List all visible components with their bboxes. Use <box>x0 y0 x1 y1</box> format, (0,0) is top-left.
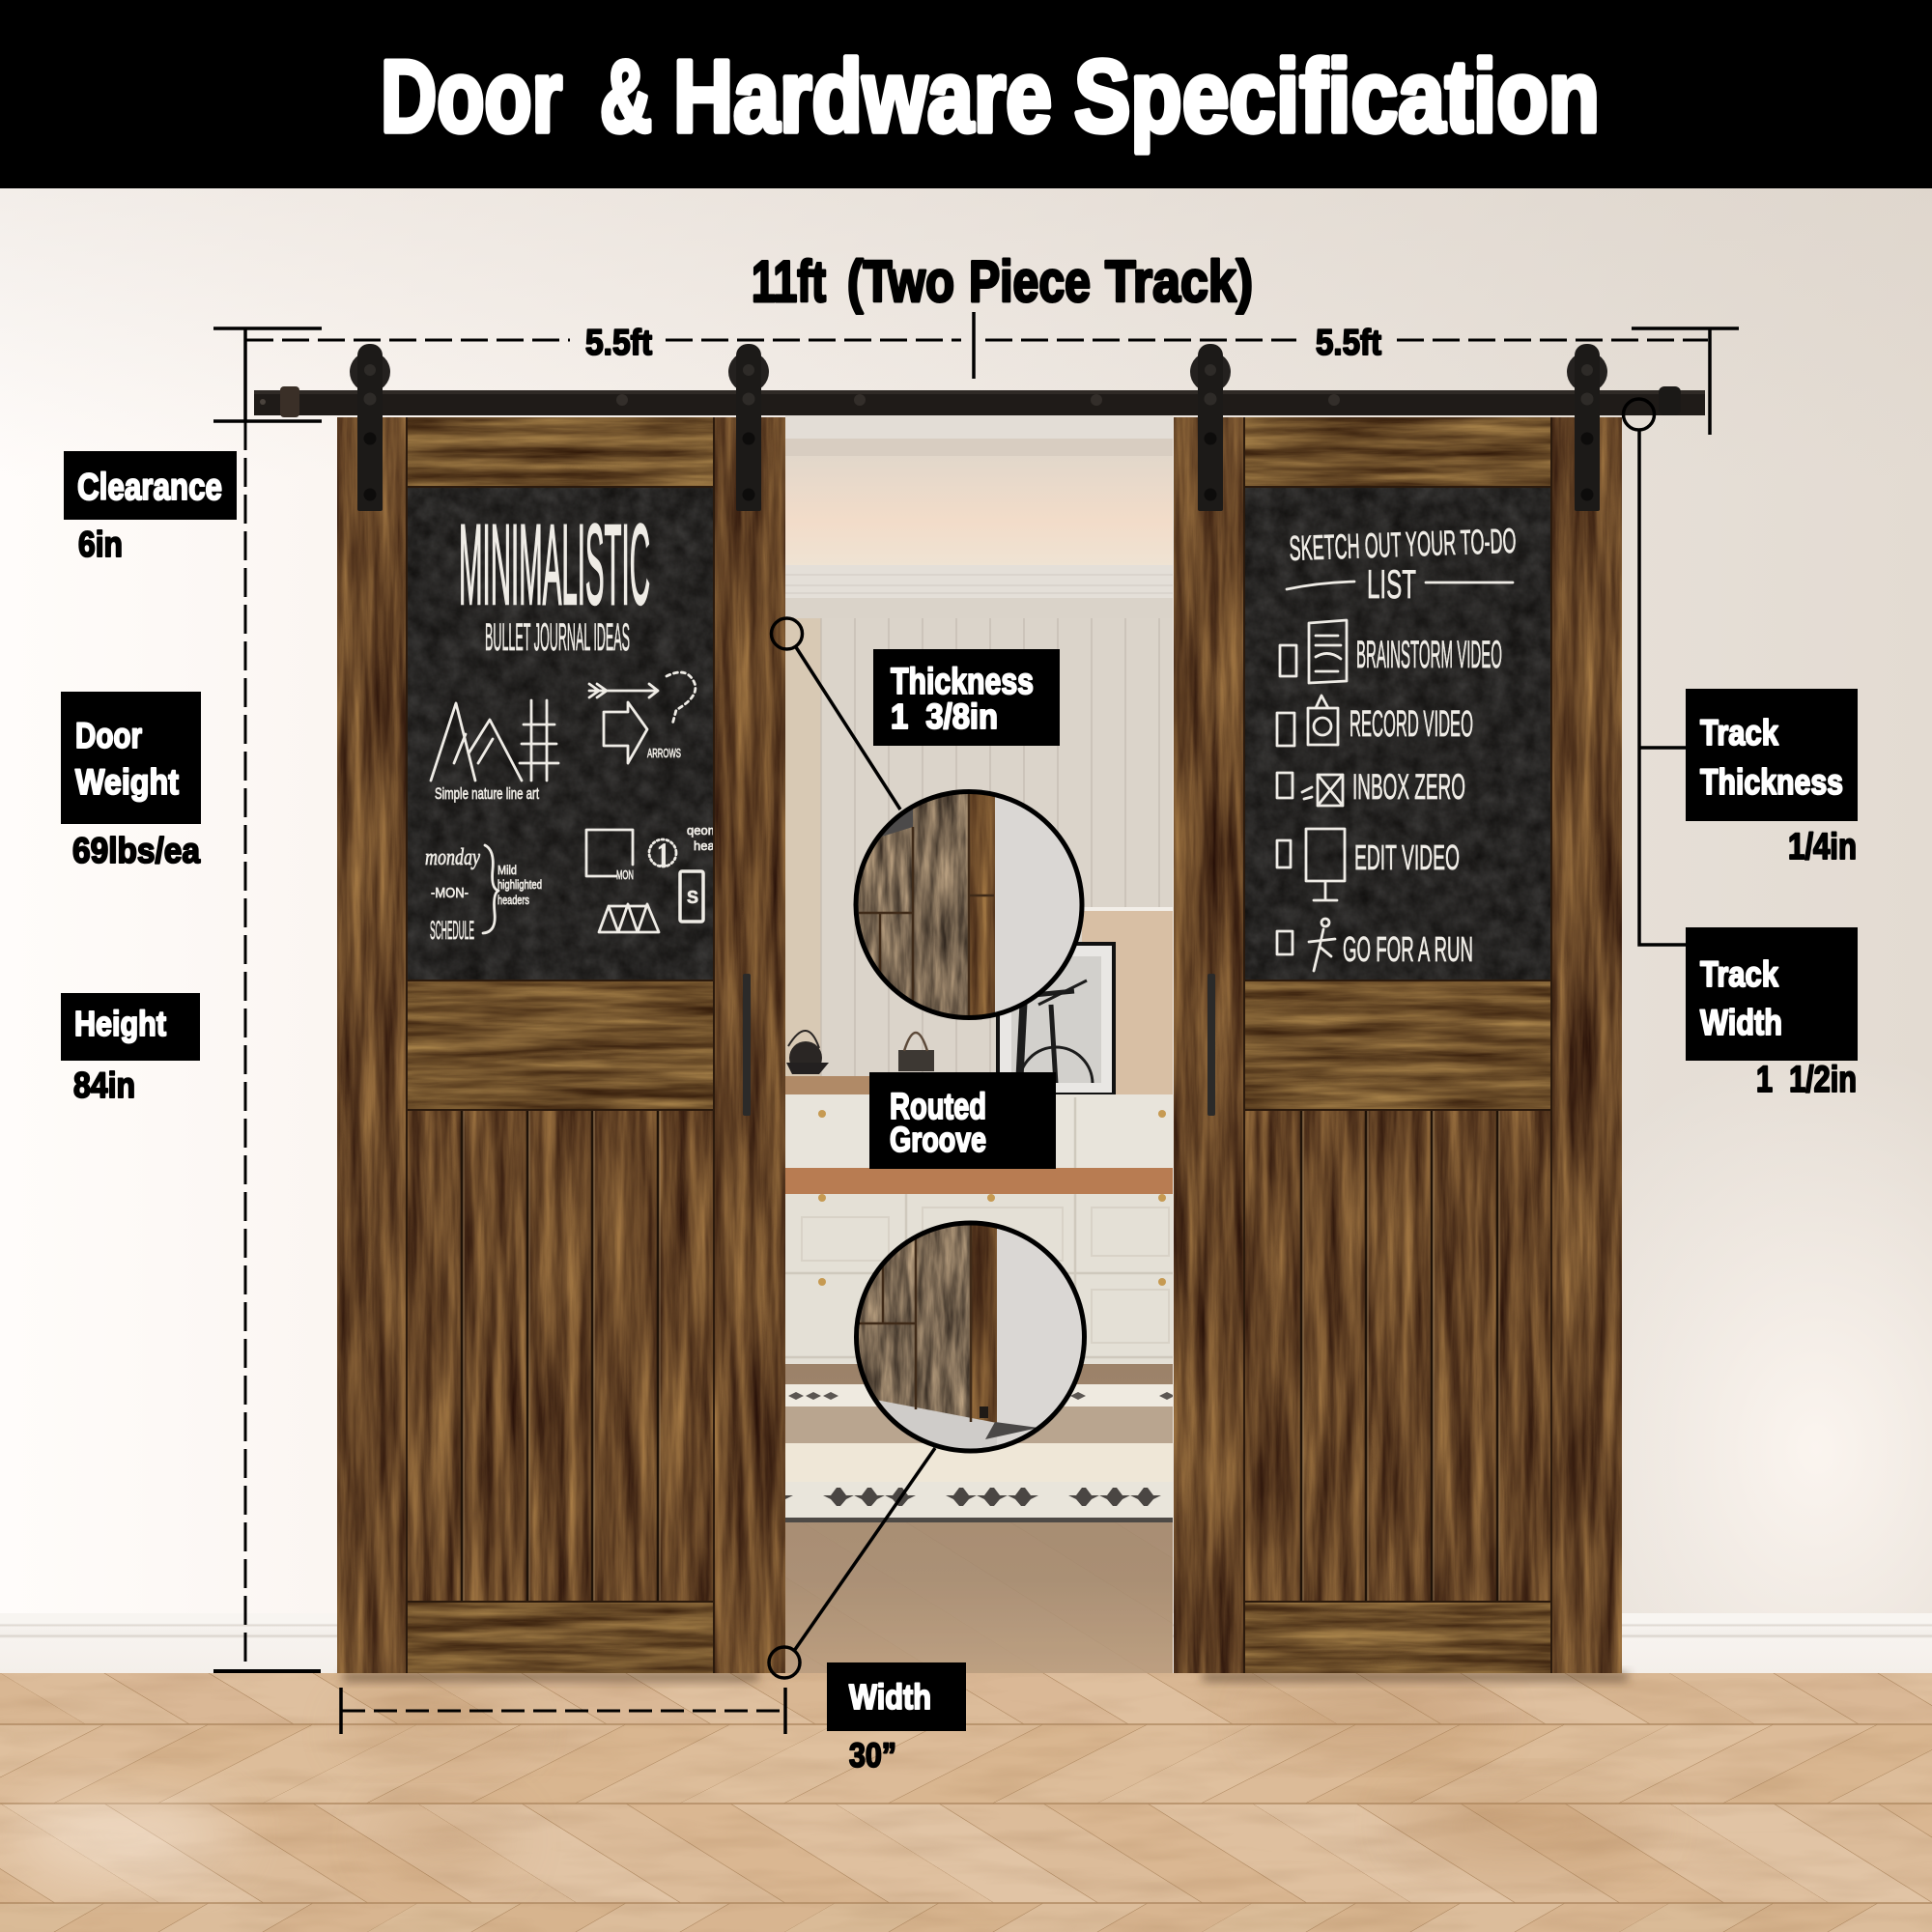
title: Door <box>381 40 562 154</box>
door height dimension line <box>213 421 321 1671</box>
callout: track thickness: Thickness <box>1700 762 1843 802</box>
title: Specification <box>1074 40 1600 154</box>
interior room seen through opening <box>785 415 1173 1673</box>
outer stiles <box>337 417 785 1673</box>
wood shelf and kettles <box>785 1031 934 1094</box>
label: 5.5ft left: 5.5ft <box>585 323 652 362</box>
top rail <box>407 417 714 487</box>
callout: door weight: 69lbs/ea <box>72 831 200 870</box>
chalkboard panel <box>407 487 725 980</box>
right barn door <box>1174 417 1622 1673</box>
frame joints <box>407 417 714 1673</box>
top rail <box>1244 417 1551 487</box>
label: 5.5ft right: 5.5ft <box>1316 323 1381 362</box>
chalk: schedule: headers <box>497 893 529 907</box>
callout: track width: Track <box>1700 954 1778 994</box>
chalk: arrows <box>589 672 696 763</box>
baseboard <box>0 1613 1932 1673</box>
callout: door weight: Door <box>75 716 142 755</box>
magnifier: routed groove <box>856 1222 1086 1454</box>
hanger strap: door 2 right <box>1567 344 1607 511</box>
interior floor <box>785 1364 1173 1673</box>
chalkboard to-do list <box>1244 487 1551 980</box>
chalk: schedule: monday <box>425 845 480 870</box>
chalk: layouts: head <box>694 838 722 853</box>
island worktop <box>785 1168 1173 1194</box>
callout: track width: 1 1/2in <box>1756 1060 1857 1100</box>
chalk: layouts: MON <box>616 867 634 882</box>
callout: width <box>827 1662 966 1775</box>
chalkboard to-do list: EDIT VIDEO <box>1354 838 1460 877</box>
title: & <box>600 40 652 154</box>
chalk: heading <box>459 501 650 659</box>
chalkboard to-do list: BRAINSTORM VIDEO <box>1356 634 1502 676</box>
crown moulding <box>785 565 1173 618</box>
callout: track thickness <box>1686 689 1858 867</box>
frame joints <box>1244 417 1551 1673</box>
chalkboard to-do list: RECORD VIDEO <box>1350 704 1473 745</box>
callout: track width <box>1686 927 1858 1100</box>
chalkboard to-do list: GO FOR A RUN <box>1343 929 1473 969</box>
chalk: mountains <box>431 700 558 803</box>
middle rail <box>407 980 714 1110</box>
chalk: layouts: S <box>687 888 698 907</box>
chalk: schedule: SCHEDULE <box>430 916 474 945</box>
door width dimension line <box>341 1688 785 1734</box>
cabinets <box>785 1094 1173 1365</box>
chalk: layouts: 1 <box>657 836 669 874</box>
door shadow on floor <box>343 1673 1628 1681</box>
track callout leader lines <box>1623 399 1686 945</box>
chalk: arrows: ARROWS <box>647 746 681 760</box>
framed bicycle photo <box>996 942 1116 1094</box>
middle rail <box>1244 980 1551 1110</box>
chalk: schedule: highlighted <box>497 877 542 892</box>
bottom rail <box>407 1602 714 1673</box>
track length heading <box>752 249 1253 314</box>
track dimension lines <box>213 312 1739 435</box>
chalk: heading <box>1287 521 1517 607</box>
callout: track thickness: 1/4in <box>1788 827 1857 867</box>
callout: door weight <box>61 692 201 870</box>
track length heading: Piece <box>969 249 1091 314</box>
door pull handle <box>1208 974 1215 1116</box>
chalk: heading: LIST <box>1367 561 1416 607</box>
header banner <box>0 0 1932 188</box>
tan wall <box>1082 907 1173 1096</box>
chalk: schedule: -MON- <box>431 885 469 901</box>
chalk: schedule <box>425 845 542 945</box>
hanger strap: door 1 left <box>350 344 390 511</box>
soffit and ceiling <box>785 415 1173 565</box>
thickness leader line <box>771 618 900 810</box>
callout: height <box>61 993 200 1105</box>
hanger strap: door 2 left <box>1190 344 1231 511</box>
callout: track width: Width <box>1700 1003 1782 1042</box>
sliding track rail <box>254 386 1705 417</box>
chalk: to-do rows <box>1280 620 1502 683</box>
magnifier: door edge thickness <box>850 791 1083 1019</box>
callout: thickness <box>873 649 1060 746</box>
chalk: heading: SKETCH OUT YOUR TO-DO <box>1289 521 1517 568</box>
callout: clearance: 6in <box>78 525 123 564</box>
track stoppers <box>280 386 299 417</box>
groove leader line <box>769 1448 935 1678</box>
callout: thickness: Thickness <box>891 662 1034 702</box>
callout: width: Width <box>849 1677 931 1717</box>
chalk: layouts: qeome <box>687 823 725 838</box>
chalkboard to-do list: INBOX ZERO <box>1352 767 1465 807</box>
callout: routed groove: Groove <box>890 1120 986 1159</box>
callout: height: 84in <box>73 1065 135 1105</box>
callout: width: 30” <box>849 1737 896 1775</box>
text: MINIMALISTIC <box>459 501 650 629</box>
bottom rail <box>1244 1602 1551 1673</box>
callout: routed groove: Routed <box>890 1087 986 1127</box>
door pull handle <box>743 974 751 1116</box>
beadboard wall <box>785 618 1173 1101</box>
callout: clearance: Clearance <box>77 467 222 508</box>
callout: door weight: Weight <box>75 762 179 802</box>
track length heading: 11ft <box>752 249 826 314</box>
callout: routed groove <box>869 1072 1056 1169</box>
herringbone floor <box>0 1673 1932 1932</box>
track length heading: (Two <box>847 249 954 314</box>
chalk: schedule: Mild <box>497 863 517 877</box>
vertical planks <box>407 1110 714 1602</box>
title: Hardware <box>673 40 1052 154</box>
chalkboard panel: BULLET JOURNAL IDEAS <box>485 616 630 659</box>
track length heading: Track) <box>1105 249 1253 314</box>
left barn door <box>337 417 785 1673</box>
chalk: layouts <box>585 827 713 933</box>
callout: clearance <box>64 451 237 564</box>
callout: thickness: 1 3/8in <box>891 696 998 736</box>
callout: height: Height <box>74 1004 166 1043</box>
vertical planks <box>1244 1110 1551 1602</box>
chalk: mountains: Simple nature line art <box>435 784 539 803</box>
callout: track thickness: Track <box>1700 713 1778 753</box>
rug <box>785 1384 1173 1522</box>
outer stiles <box>1174 417 1622 1673</box>
hanger strap: door 1 right <box>728 344 769 511</box>
title <box>381 40 1600 154</box>
